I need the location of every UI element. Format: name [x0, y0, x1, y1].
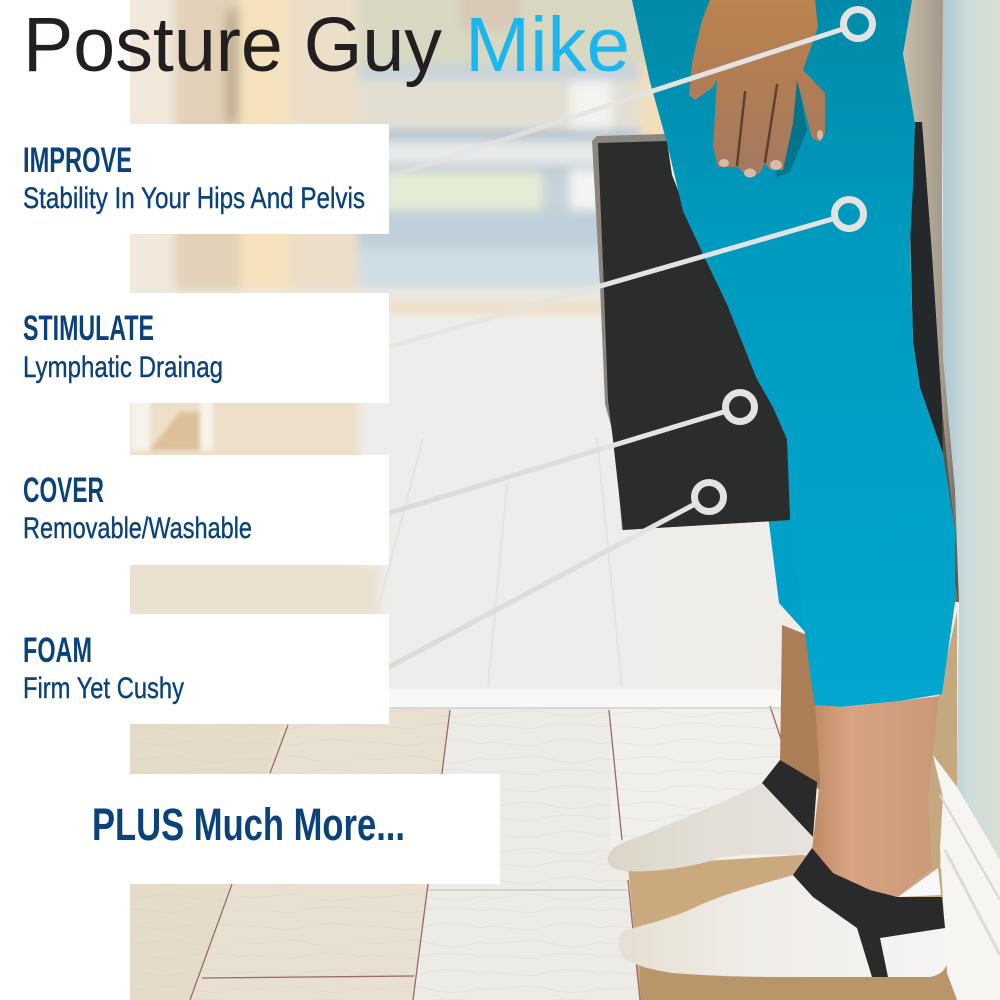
panel: plus much more [0, 774, 500, 884]
panel: plus much more: PLUS Much More... [92, 799, 405, 850]
panel: cover: COVER [23, 471, 104, 510]
panel: improve: Stability In Your Hips And Pelvis [23, 182, 365, 215]
hand [689, 0, 825, 178]
panel: improve [0, 124, 389, 234]
front leg teal legging [632, 0, 955, 707]
panel: stimulate: Lymphatic Drainag [23, 351, 223, 384]
panel: improve: IMPROVE [23, 141, 132, 180]
rear foam wedge [910, 122, 959, 602]
title: Posture Guy [23, 2, 442, 88]
left white column [0, 0, 130, 1000]
panel: stimulate [0, 293, 389, 403]
pointer: foam [389, 482, 724, 667]
pointer: improve [389, 10, 872, 177]
back leg teal legging [768, 515, 815, 640]
floor planks [130, 706, 960, 1000]
panel: cover [0, 455, 389, 565]
panel: foam: Firm Yet Cushy [23, 672, 184, 705]
panel: foam [0, 614, 389, 724]
front foot sock [619, 848, 947, 977]
panel: foam: FOAM [23, 631, 92, 670]
pointer: stimulate [389, 200, 864, 347]
panel: cover: Removable/Washable [23, 512, 252, 545]
back leg skin [780, 625, 820, 790]
front ankle skin [812, 696, 939, 897]
pointer: cover [389, 392, 754, 513]
title: Mike [465, 2, 630, 88]
wall and baseboard [903, 0, 1000, 1000]
back foot sock [608, 760, 817, 871]
panel: stimulate: STIMULATE [23, 309, 154, 348]
foam wedge [592, 134, 791, 530]
door detail [130, 400, 213, 450]
